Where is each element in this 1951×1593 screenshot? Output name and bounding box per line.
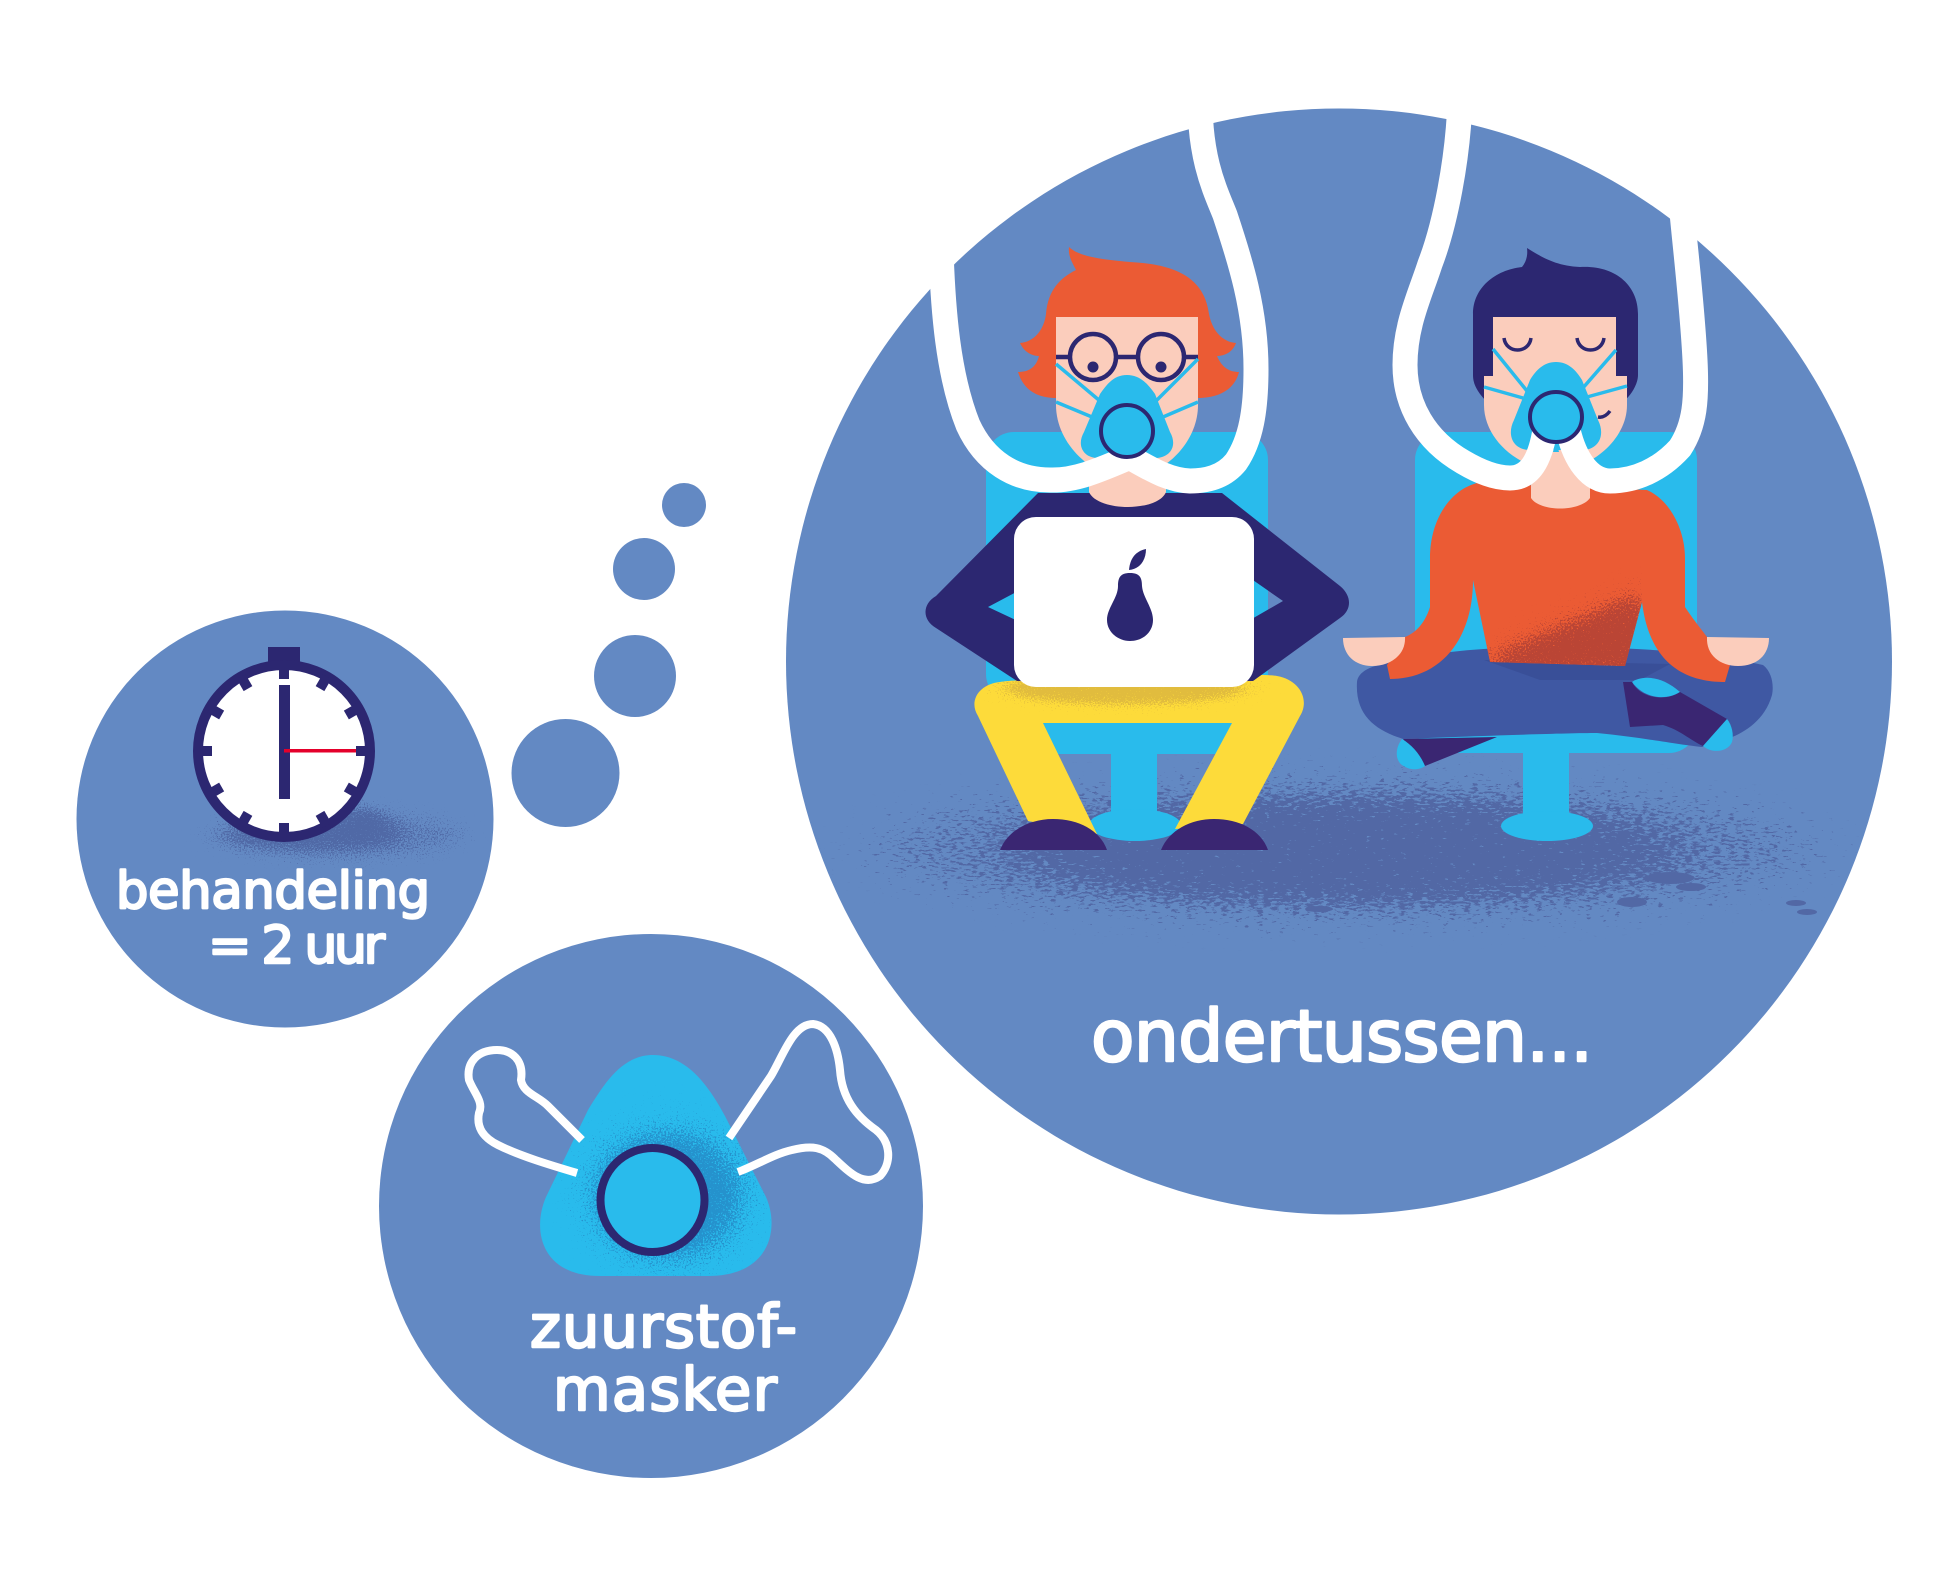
laptop	[1014, 517, 1254, 687]
mask ring	[1530, 392, 1582, 442]
mask straps	[469, 1024, 888, 1180]
hair: orange	[1018, 247, 1239, 398]
neck	[1531, 450, 1590, 508]
mask straps	[1056, 359, 1198, 417]
mask ring	[1101, 405, 1153, 457]
panel: oxygen mask	[379, 934, 923, 1478]
crossed legs	[1357, 647, 1773, 747]
icon: pear logo	[1107, 549, 1153, 641]
icon: stopwatch	[198, 647, 370, 837]
oxygen mask	[1081, 375, 1173, 458]
heading: ondertussen: ondertussen...	[1091, 995, 1593, 1078]
legs: yellow trousers	[974, 671, 1304, 834]
hands	[1343, 637, 1769, 666]
label: behandeling: behandeling	[116, 862, 430, 921]
face	[1056, 317, 1198, 478]
mask tip	[1553, 448, 1559, 452]
label: masker: masker	[553, 1355, 778, 1424]
figure: man meditating	[1343, 100, 1773, 841]
glasses	[1056, 334, 1198, 380]
seat: meditating man	[1415, 432, 1697, 841]
clock shadow	[205, 806, 465, 861]
face	[1484, 317, 1627, 470]
large scene circle	[786, 108, 1892, 1214]
sweater	[1387, 483, 1730, 682]
figure: man with laptop	[926, 100, 1349, 850]
foot left	[1397, 737, 1497, 769]
arms and torso: navy sweater	[926, 493, 1349, 681]
oxygen mask	[1511, 362, 1601, 450]
label: 2 uur: = 2 uur	[208, 916, 386, 976]
seat: man	[986, 432, 1268, 841]
leg shadow	[1484, 660, 1670, 680]
thought bubbles	[512, 483, 706, 827]
shoes	[1000, 819, 1268, 850]
oxygen tubes	[1405, 100, 1696, 481]
foot right	[1623, 678, 1733, 751]
oxygen tubes	[941, 100, 1256, 481]
panel: ondertussen scene	[786, 100, 1892, 1214]
mask straps	[1484, 349, 1627, 398]
hair: navy	[1473, 248, 1638, 400]
label: zuurstof-: zuurstof-	[530, 1292, 797, 1361]
panel: treatment time	[76, 610, 494, 1028]
closed eyes	[1504, 338, 1610, 417]
neck	[1089, 470, 1166, 507]
floor shadow	[874, 778, 1817, 922]
oxygen mask body	[540, 1055, 772, 1276]
mask ring	[600, 1148, 704, 1252]
mask circle	[379, 934, 923, 1478]
clock circle	[76, 610, 494, 1028]
